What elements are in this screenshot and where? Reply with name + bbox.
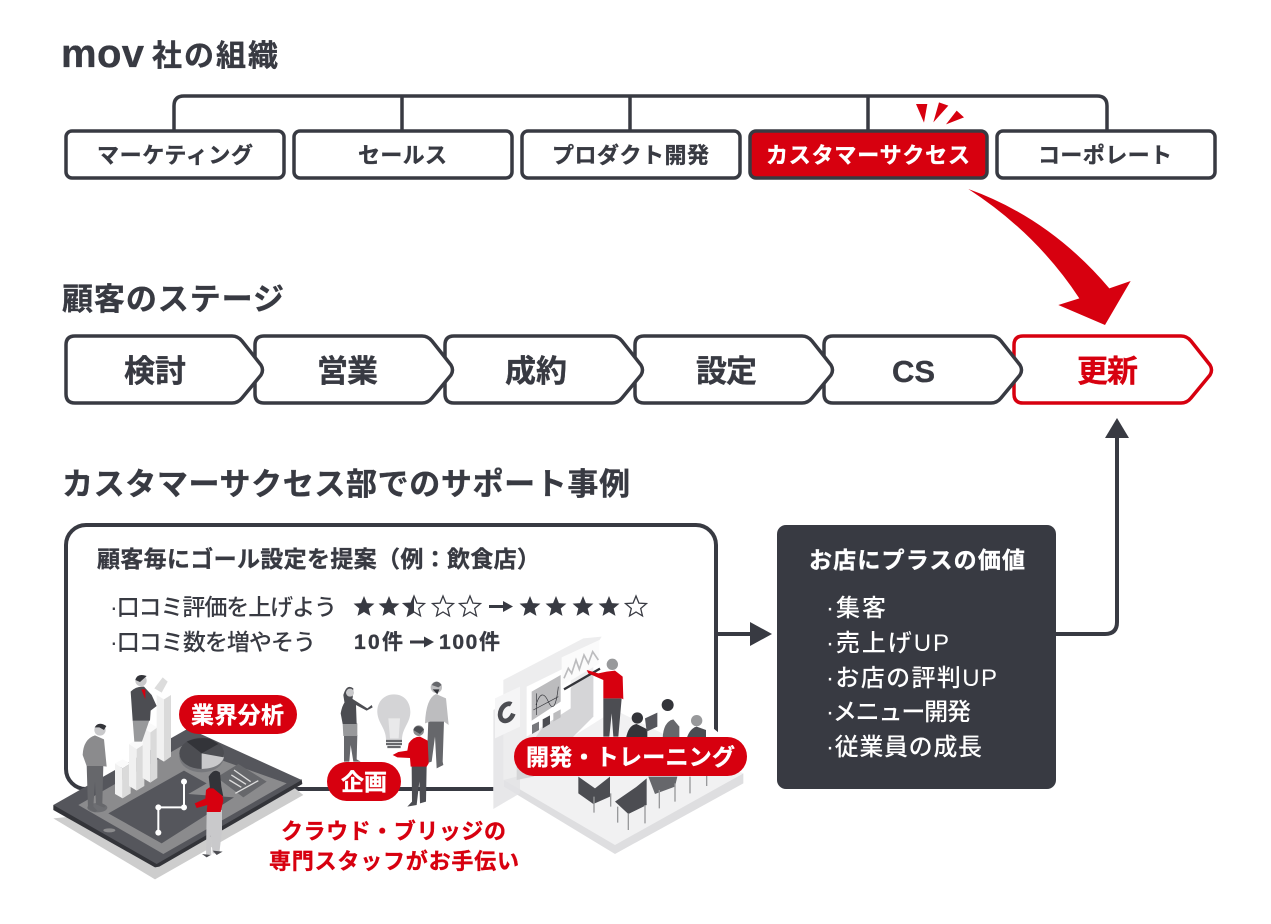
text: specialist staff support <box>269 819 519 874</box>
department: marketing <box>66 131 284 178</box>
icon: emphasis sparks <box>916 102 964 124</box>
label: planning: 企画 <box>341 769 387 795</box>
panel: added value for the store <box>777 525 1056 789</box>
stage flow <box>66 336 1212 403</box>
stage: contract <box>445 336 642 403</box>
stage: contract: 成約 <box>505 354 567 389</box>
illustration: planning team with light bulb <box>341 682 449 807</box>
heading: mov organisation <box>61 32 278 76</box>
stage: consideration <box>66 336 262 403</box>
stage: sales: 営業 <box>317 354 378 389</box>
label: development and training <box>514 737 747 776</box>
stage: CS <box>824 336 1022 403</box>
stage: renewal <box>1014 336 1212 403</box>
arrow: customer success to renewal <box>968 189 1131 325</box>
text: increase review count: ·口コミ数を増やそう <box>110 629 316 655</box>
panel heading: goal proposal: 顧客毎にゴール設定を提案（例：飲食店） <box>97 546 540 572</box>
department: corporate: コーポレート <box>1038 143 1172 168</box>
list: benefits: ·従業員の成長 <box>826 734 982 761</box>
org chart <box>66 96 1215 178</box>
text: specialist staff support: クラウド・ブリッジの <box>281 819 506 844</box>
text: 10 to 100 reviews: 100件 <box>439 631 500 654</box>
figure: man in red <box>393 725 429 807</box>
figure: woman in red <box>195 771 223 857</box>
panel: goal proposal outline <box>66 525 716 789</box>
heading: mov organisation: mov <box>61 32 145 76</box>
bar chart <box>115 677 171 798</box>
star rating: from 2.5 to 4 stars <box>354 596 646 616</box>
figures: seated trainees <box>578 699 707 830</box>
stage: sales <box>255 336 452 403</box>
stage: settings <box>635 336 832 403</box>
figure: presenter <box>587 659 623 737</box>
department: sales: セールス <box>358 143 447 168</box>
arrow: panel to added value <box>716 622 772 646</box>
list: benefits: ·集客 <box>826 595 886 622</box>
label: industry analysis: 業界分析 <box>191 702 284 728</box>
stage: settings: 設定 <box>696 354 757 389</box>
department: sales <box>294 131 512 178</box>
icon: light bulb <box>377 694 410 747</box>
text: 10 to 100 reviews <box>354 631 500 654</box>
department: customer success (highlighted): カスタマーサクセス <box>766 143 970 168</box>
department: product development <box>522 131 740 178</box>
list: benefits: ·売上げUP <box>826 630 949 657</box>
figure: bearded man <box>425 682 449 768</box>
text: raise review rating: ·口コミ評価を上げよう <box>110 594 337 620</box>
figure: woman pointing <box>341 687 373 762</box>
stage: CS: CS <box>892 354 935 389</box>
stage: renewal: 更新 <box>1077 354 1138 389</box>
list: benefits <box>826 595 997 761</box>
list: benefits: ·メニュー開発 <box>826 699 971 726</box>
donut chart <box>495 687 520 738</box>
heading: customer success support examples: カスタマーサクセス部でのサポート事例 <box>62 467 630 502</box>
heading: customer stages: 顧客のステージ <box>62 282 284 317</box>
arrow: added value to renewal <box>1056 418 1129 634</box>
label: development and training: 開発・トレーニング <box>526 744 735 770</box>
illustration: tablet analysis scene <box>53 675 303 879</box>
chart screen <box>527 665 571 737</box>
illustration: training room <box>493 637 747 854</box>
department: customer success (highlighted) <box>750 131 987 178</box>
department: corporate <box>997 131 1215 178</box>
stage: consideration: 検討 <box>124 354 186 389</box>
label: planning <box>327 762 401 801</box>
department: product development: プロダクト開発 <box>552 143 709 168</box>
heading: mov organisation: 社の組織 <box>152 40 278 73</box>
text: 10 to 100 reviews: 10件 <box>354 631 403 654</box>
text: specialist staff support: 専門スタッフがお手伝い <box>269 849 519 874</box>
list: benefits: ·お店の評判UP <box>826 665 997 692</box>
panel heading: added value: お店にプラスの価値 <box>809 547 1025 573</box>
line chart panel <box>562 640 600 689</box>
figure: businessman on chart <box>131 675 157 742</box>
department: marketing: マーケティング <box>97 143 253 168</box>
figure: thinking man <box>83 724 107 812</box>
pie chart <box>179 738 224 772</box>
label: industry analysis <box>179 695 297 734</box>
